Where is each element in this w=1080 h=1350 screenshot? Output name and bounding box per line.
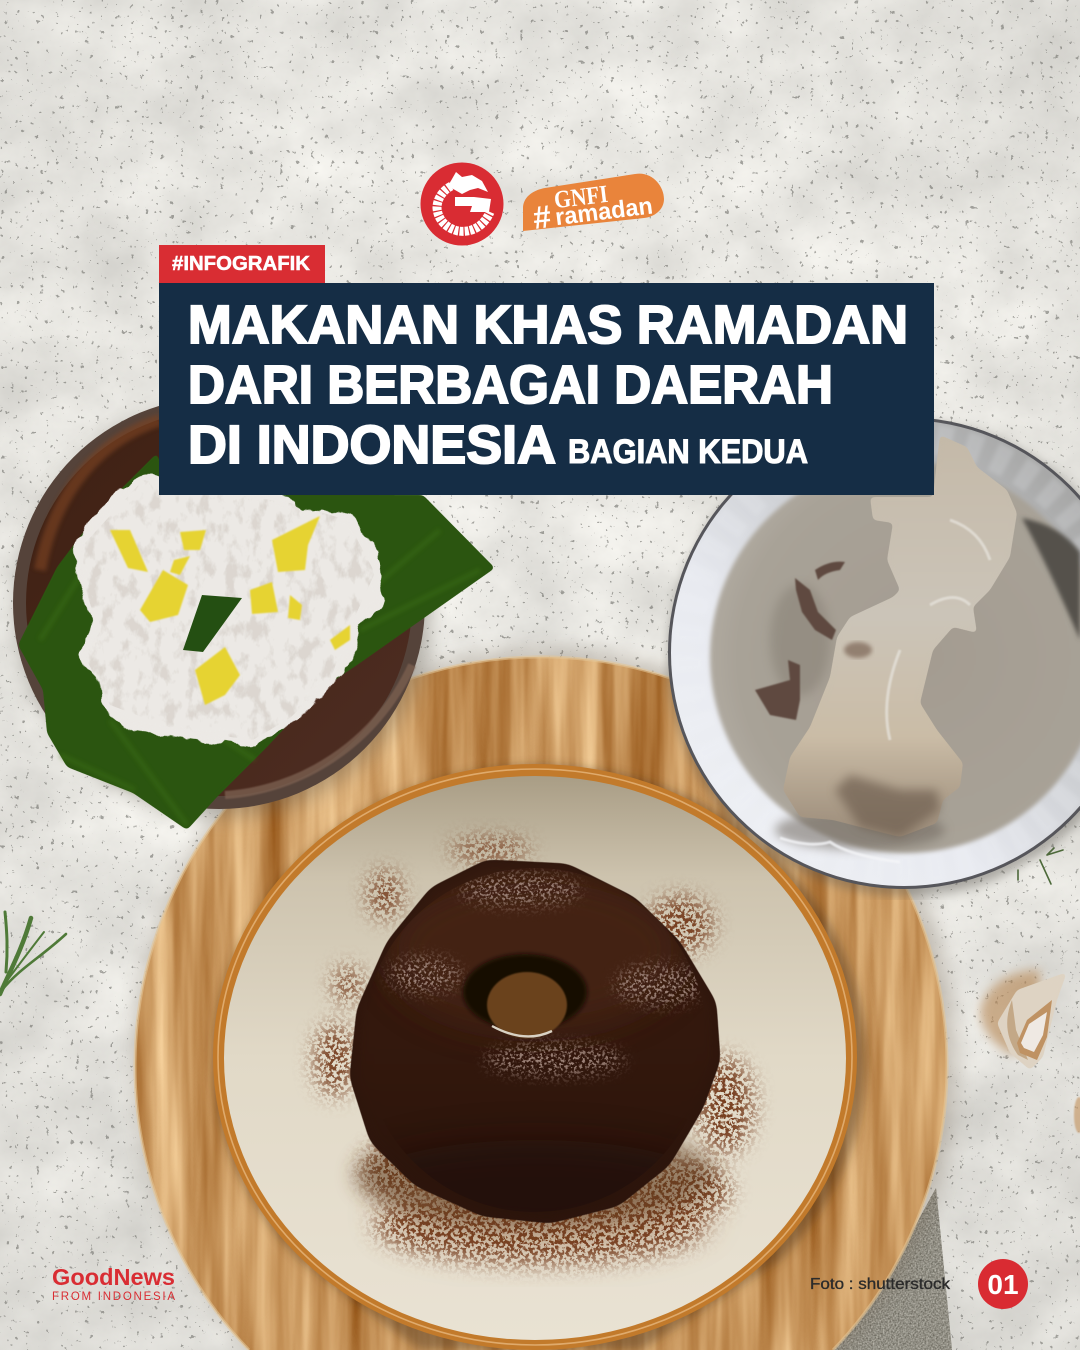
title block: DARI BERBAGAI DAERAH	[188, 355, 833, 415]
header logo: GNFI garuda emblem	[420, 162, 504, 246]
wooden serving board	[130, 650, 956, 1350]
palm sugar powder scattered on plate	[315, 840, 753, 1263]
garlic clove	[980, 970, 1067, 1070]
footer logo: GoodNews from Indonesia	[52, 1264, 175, 1303]
cloth napkin	[830, 1188, 952, 1350]
banana leaf	[18, 453, 495, 830]
header badge: #GNFI ramadan: #	[531, 198, 553, 236]
header badge: #GNFI ramadan: ramadan	[554, 192, 654, 231]
tag: #INFOGRAFIK	[159, 245, 325, 283]
footer logo: GoodNews from Indonesia: GoodNews	[52, 1264, 175, 1290]
header badge: #GNFI ramadan	[523, 174, 664, 236]
tag: #INFOGRAFIK: #INFOGRAFIK	[172, 253, 311, 275]
rosemary sprig	[0, 912, 66, 994]
header badge: #GNFI ramadan: GNFI	[553, 181, 609, 214]
title block: BAGIAN KEDUA	[568, 433, 808, 471]
page number badge	[978, 1259, 1028, 1309]
meat bits	[755, 562, 845, 720]
chicken pieces	[783, 435, 1017, 837]
twig behind bowl	[1018, 848, 1063, 884]
ceramic plate with orange rim	[213, 764, 866, 1350]
title block: MAKANAN KHAS RAMADAN	[188, 295, 908, 355]
title block	[159, 283, 934, 495]
soup bowl with chicken	[668, 417, 1080, 896]
footer logo: GoodNews from Indonesia: FROM INDONESIA	[52, 1291, 175, 1303]
rustic brown plate	[13, 397, 430, 816]
pandan leaf strip	[183, 595, 242, 652]
garlic fragment at right edge	[1074, 1097, 1080, 1133]
page number badge: 01	[987, 1269, 1019, 1300]
title block: DI INDONESIA	[188, 415, 556, 475]
shredded coconut rice mound	[77, 478, 381, 743]
cake centre hole	[463, 954, 587, 1038]
steamed palm sugar cake	[350, 863, 720, 1240]
yellow jackfruit pieces	[110, 516, 350, 705]
photo credit: Foto : shutterstock	[810, 1276, 951, 1293]
